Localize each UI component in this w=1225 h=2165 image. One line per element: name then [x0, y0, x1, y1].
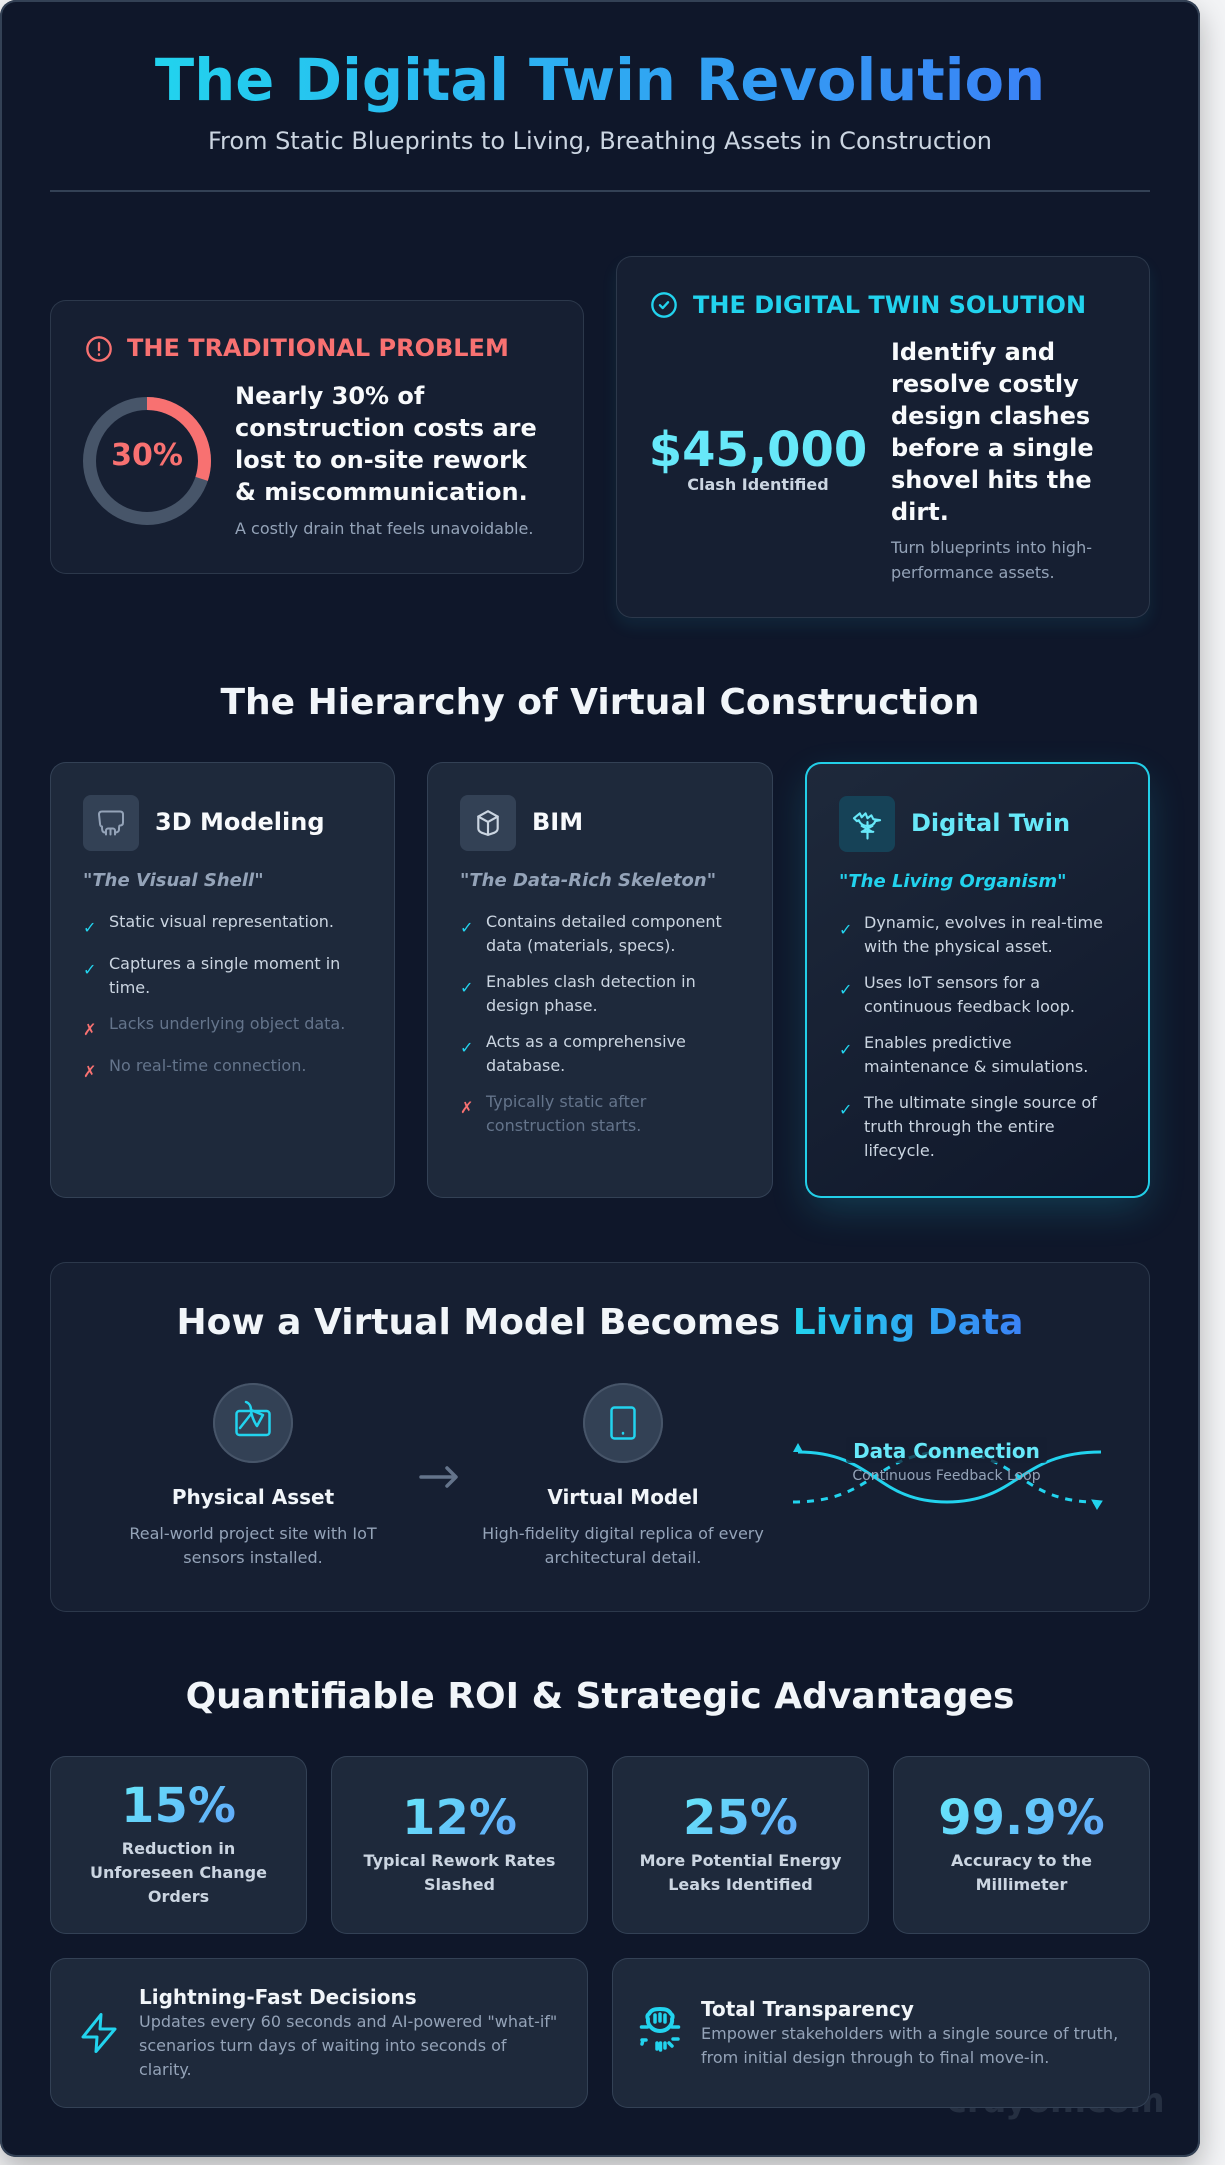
feature list: continuous feedback loop. — [864, 997, 1075, 1016]
step title: Physical Asset — [172, 1485, 334, 1509]
solution note — [890, 538, 1092, 582]
section heading: ROI: Quantifiable ROI & Strategic Advantages — [186, 1676, 1014, 1717]
problem statement — [235, 382, 537, 506]
stat label: Typical Rework Rates — [364, 1851, 555, 1870]
stat label: Orders — [148, 1887, 209, 1906]
feature list: truth through the entire — [864, 1117, 1055, 1136]
problem heading: THE TRADITIONAL PROBLEM — [127, 334, 509, 362]
stat label: Reduction in — [122, 1839, 235, 1858]
feature list: ✗ — [83, 1062, 96, 1081]
feature list: Typically static after — [486, 1092, 646, 1111]
problem statement: & miscommunication. — [235, 478, 528, 506]
label backdrop — [846, 1437, 1047, 1463]
icon: physical asset — [213, 1383, 293, 1463]
data connection diagram — [793, 1439, 1103, 1510]
tagline: "The Data-Rich Skeleton" — [460, 870, 716, 891]
icon: alert circle — [86, 336, 112, 362]
icon: transparency — [640, 2007, 680, 2052]
icon: lightning — [81, 2013, 117, 2053]
feature list — [83, 912, 345, 1081]
solution statement: before a single — [891, 434, 1094, 462]
feature list: ✓ — [839, 1100, 852, 1119]
icon: 3D shell — [83, 795, 139, 851]
benefit description — [701, 2024, 1118, 2067]
feature list: Enables predictive — [864, 1033, 1012, 1052]
stat card: 12 percent — [331, 1756, 588, 1934]
solution statement: design clashes — [891, 402, 1090, 430]
stat label: Clash Identified — [687, 475, 829, 494]
feature list — [839, 913, 1103, 1160]
feature list: construction starts. — [486, 1116, 641, 1135]
solution note: performance assets. — [891, 563, 1055, 582]
stat label — [640, 1851, 842, 1894]
header divider — [50, 190, 1150, 192]
step description: architectural detail. — [545, 1548, 701, 1567]
feature list: time. — [109, 978, 150, 997]
step: physical asset — [129, 1383, 377, 1567]
feature list: Acts as a comprehensive — [486, 1032, 686, 1051]
step description: High-fidelity digital replica of every — [482, 1524, 764, 1543]
stat value: 99.9% — [938, 1790, 1105, 1846]
feature list: data (materials, specs). — [486, 936, 675, 955]
heading: BIM: BIM — [532, 808, 583, 836]
feature list — [460, 912, 722, 1135]
step description: Real-world project site with IoT — [129, 1524, 377, 1543]
donut value: 30% — [111, 438, 183, 473]
stat label — [951, 1851, 1092, 1894]
feature list: design phase. — [486, 996, 598, 1015]
step description: sensors installed. — [183, 1548, 323, 1567]
stat card: 99.9 percent — [893, 1756, 1150, 1934]
step description — [129, 1524, 377, 1567]
icon: digital twin — [839, 796, 895, 852]
feature list: ✗ — [83, 1020, 96, 1039]
icon: check circle — [651, 292, 677, 318]
donut chart: 30 percent — [83, 397, 211, 525]
panel: BIM — [427, 762, 773, 1198]
feature list: The ultimate single source of — [864, 1093, 1097, 1112]
benefit description — [139, 2012, 557, 2079]
feature list: Dynamic, evolves in real-time — [864, 913, 1103, 932]
watermark: crayon.com — [947, 2081, 1165, 2120]
icon: virtual model — [583, 1383, 663, 1463]
stat value: 25% — [683, 1790, 798, 1846]
icon: arrow — [419, 1466, 458, 1488]
heading: 3D Modeling: 3D Modeling — [155, 808, 325, 836]
feature list: ✓ — [839, 920, 852, 939]
solution statement: resolve costly — [891, 370, 1079, 398]
feature list: lifecycle. — [864, 1141, 935, 1160]
feature list: with the physical asset. — [864, 937, 1053, 956]
stat label: Leaks Identified — [668, 1875, 813, 1894]
step title: Virtual Model — [547, 1485, 699, 1509]
benefit title: Lightning-Fast Decisions — [139, 1985, 417, 2009]
feature list: Uses IoT sensors for a — [864, 973, 1040, 992]
feature list: Static visual representation. — [109, 912, 334, 931]
stat label: Unforeseen Change — [90, 1863, 267, 1882]
subtitle: From Static Blueprints to Living, Breathing Assets in Construction — [208, 127, 992, 155]
stat label: Accuracy to the — [951, 1851, 1092, 1870]
feature list: ✓ — [839, 1040, 852, 1059]
tagline: "The Visual Shell" — [83, 870, 264, 891]
panel: Digital Twin — [805, 762, 1150, 1198]
feature list: database. — [486, 1056, 565, 1075]
benefit description: Empower stakeholders with a single source of truth, — [701, 2024, 1118, 2043]
stat label — [364, 1851, 555, 1894]
feature list: Enables clash detection in — [486, 972, 696, 991]
panel: 3D modeling — [50, 762, 395, 1198]
step description — [482, 1524, 764, 1567]
feature list: ✓ — [83, 918, 96, 937]
stat value: 12% — [402, 1790, 517, 1846]
stat value: 15% — [121, 1778, 236, 1834]
solution statement: Identify and — [891, 338, 1055, 366]
stat card: 15 percent — [50, 1756, 307, 1934]
stat label: Slashed — [424, 1875, 495, 1894]
feature list: ✓ — [460, 1038, 473, 1057]
feature list: ✓ — [839, 980, 852, 999]
panel: how a virtual model becomes living data — [50, 1262, 1150, 1612]
benefit description: from initial design through to final move-in. — [701, 2048, 1049, 2067]
label: data connection: Data Connection — [853, 1439, 1040, 1463]
data flow curves — [793, 1443, 1103, 1510]
solution statement: dirt. — [891, 498, 949, 526]
stat label: More Potential Energy — [640, 1851, 841, 1870]
feature list: ✓ — [83, 960, 96, 979]
feature list: maintenance & simulations. — [864, 1057, 1088, 1076]
stat card: 25 percent — [612, 1756, 869, 1934]
heading: Digital Twin: Digital Twin — [911, 809, 1070, 837]
feature list: Contains detailed component — [486, 912, 722, 931]
feature list: No real-time connection. — [109, 1056, 306, 1075]
solution note: Turn blueprints into high- — [891, 538, 1092, 557]
section heading: hierarchy: The Hierarchy of Virtual Construction — [220, 682, 980, 723]
problem statement: Nearly 30% of — [235, 382, 424, 410]
solution statement: shovel hits the — [891, 466, 1092, 494]
step: virtual model — [482, 1383, 764, 1567]
panel: digital twin solution — [616, 256, 1150, 618]
benefit description: scenarios turn days of waiting into seconds of — [139, 2036, 507, 2055]
label: continuous feedback loop: Continuous Feedback Loop — [852, 1468, 1041, 1484]
benefit title: Total Transparency — [701, 1997, 914, 2021]
feature list: Captures a single moment in — [109, 954, 340, 973]
problem statement: lost to on-site rework — [235, 446, 527, 474]
solution statement — [891, 338, 1094, 526]
feature list: ✓ — [460, 918, 473, 937]
feature list: ✓ — [460, 978, 473, 997]
stat label: Millimeter — [976, 1875, 1067, 1894]
benefit description: clarity. — [139, 2060, 192, 2079]
icon: BIM cube — [460, 795, 516, 851]
feature list: ✗ — [460, 1098, 473, 1117]
benefit description: Updates every 60 seconds and AI-powered "what-if" — [139, 2012, 557, 2031]
panel: lightning-fast decisions — [50, 1958, 588, 2108]
panel: traditional problem — [50, 300, 584, 574]
solution heading: THE DIGITAL TWIN SOLUTION — [693, 291, 1086, 319]
tagline: "The Living Organism" — [839, 871, 1067, 892]
stat: clash value: $45,000 — [649, 422, 867, 478]
panel heading: How a Virtual Model Becomes Living Data — [177, 1302, 1023, 1343]
problem statement: construction costs are — [235, 414, 537, 442]
panel: total transparency — [612, 1958, 1150, 2108]
title: The Digital Twin Revolution — [155, 47, 1045, 114]
stat label — [90, 1839, 267, 1906]
feature list: Lacks underlying object data. — [109, 1014, 345, 1033]
problem note: A costly drain that feels unavoidable. — [235, 519, 533, 538]
